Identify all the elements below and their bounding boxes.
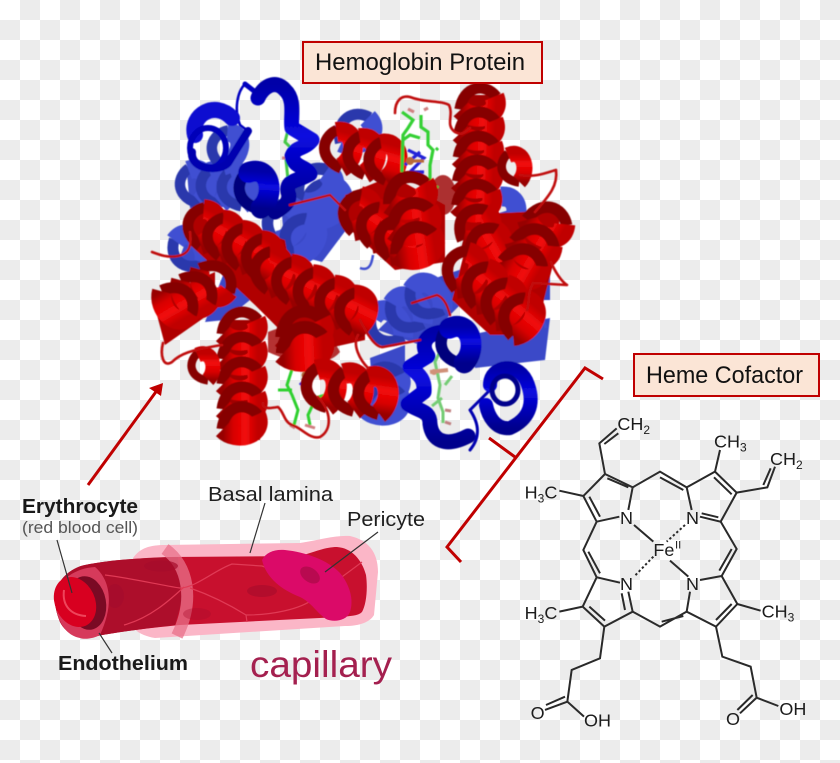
bracket: heme cofactor within protein (447, 368, 603, 562)
label: Erythrocyte: (red blood cell) (22, 518, 138, 537)
cell nuclei (106, 560, 277, 620)
arrow: capillary to hemoglobin (88, 383, 163, 485)
heme atom labels: 3 (788, 610, 795, 624)
label: Heme Cofactor (634, 354, 819, 396)
pericyte nucleus (297, 563, 323, 587)
heme atom labels: H (525, 482, 538, 502)
heme atom labels: CH (617, 414, 643, 434)
endothelial cell outlines (105, 562, 362, 625)
title label: Hemoglobin Protein: Hemoglobin Protein (315, 49, 525, 76)
heme atom labels: Fe (653, 540, 674, 560)
label: Basal lamina: Basal lamina (208, 484, 334, 506)
capillary opening ring (55, 567, 109, 639)
pale sheath ring (165, 549, 187, 636)
label: Heme Cofactor: Heme Cofactor (646, 362, 803, 389)
heme atom labels: 3 (538, 612, 545, 626)
erythrocyte dimple (64, 590, 86, 616)
heme atom labels: 3 (740, 441, 747, 455)
heme atom labels: CH (714, 432, 740, 452)
heme atom labels: 2 (796, 458, 803, 472)
pericyte cell (262, 550, 352, 621)
heme atom labels: O (726, 709, 740, 729)
heme atom labels: C (544, 603, 557, 623)
heme atom labels: CH (762, 601, 788, 621)
blue chain: front helices and coils (190, 84, 531, 450)
label: Pericyte: Pericyte (347, 509, 425, 531)
heme atom labels: N (620, 508, 633, 528)
heme bonds (545, 428, 778, 717)
dark red background masses (153, 95, 560, 440)
heme group: bottom right (430, 347, 452, 424)
label: Erythrocyte (22, 496, 138, 537)
heme group: top left (282, 130, 298, 180)
heme atom labels: 3 (538, 491, 545, 505)
darker left segment (55, 557, 182, 638)
heme group: top right (402, 108, 438, 203)
heme chemical structure (525, 414, 806, 731)
red helix: upper middle (320, 128, 401, 182)
heme atom labels: II (675, 539, 681, 551)
capillary tube body (55, 547, 367, 638)
heme atom labels: N (686, 574, 699, 594)
heme atom labels: H (525, 603, 538, 623)
heme atom labels: OH (779, 699, 806, 719)
erythrocyte cell (46, 570, 104, 634)
basal lamina: pale outer sheath (133, 536, 378, 638)
heme atom labels: N (686, 508, 699, 528)
heme atom labels: 2 (643, 423, 650, 437)
label: Erythrocyte: Erythrocyte (22, 496, 138, 518)
label: capillary: capillary (250, 644, 393, 685)
heme atom labels: N (620, 574, 633, 594)
heme atom labels: C (544, 482, 557, 502)
heme atom labels (525, 414, 806, 731)
hemoglobin protein ribbon structure (152, 84, 571, 450)
title label: Hemoglobin Protein (303, 42, 542, 83)
heme group: bottom left (278, 330, 325, 428)
label: Endothelium: Endothelium (58, 653, 188, 675)
heme atom labels: OH (584, 711, 611, 731)
capillary illustration (46, 503, 378, 653)
red chains: helices and loops (152, 87, 571, 437)
heme atom labels: CH (770, 449, 796, 469)
heme atom labels: O (531, 703, 545, 723)
capillary lumen (64, 573, 110, 633)
faded blue background helices (167, 110, 550, 418)
pointer lines (57, 503, 378, 653)
